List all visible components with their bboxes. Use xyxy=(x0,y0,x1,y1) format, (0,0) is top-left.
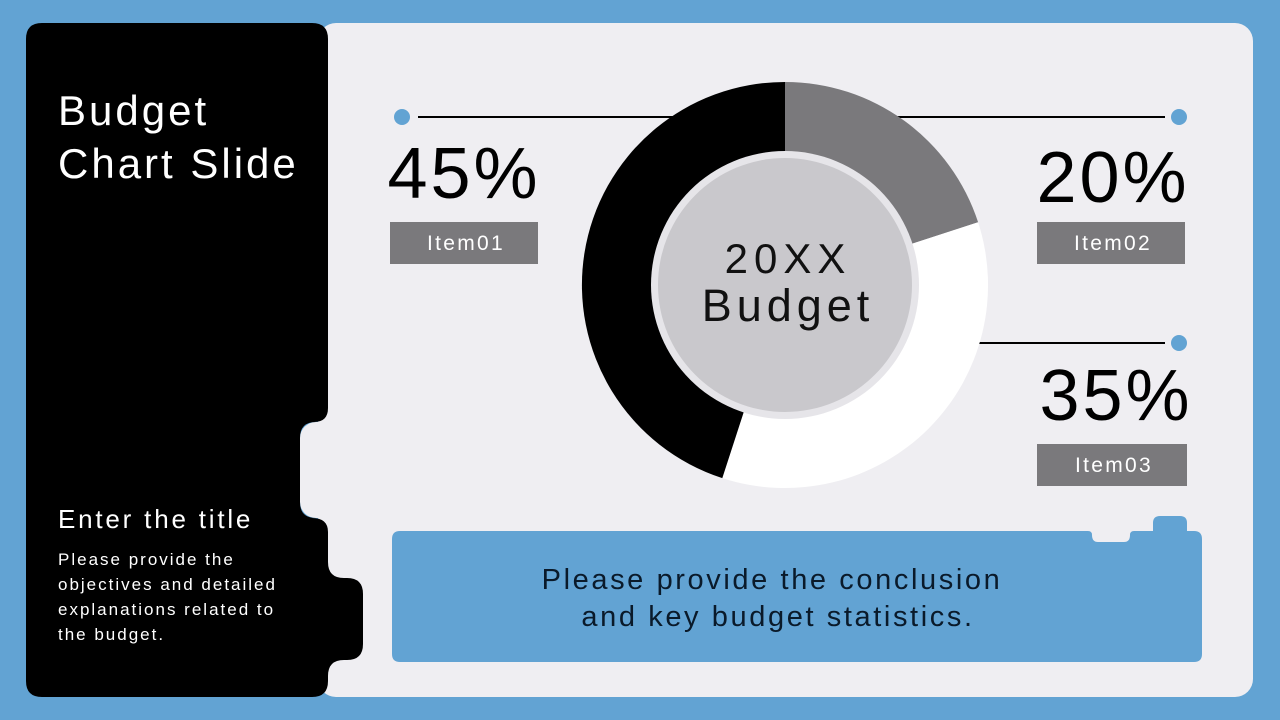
title: Chart Slide xyxy=(58,140,299,187)
conclusion box: and key budget statistics. xyxy=(581,601,975,633)
description text xyxy=(58,550,277,644)
title: Budget xyxy=(58,87,209,134)
description text: the budget. xyxy=(58,625,165,644)
item02: Item02 xyxy=(1074,232,1152,255)
item01: 45% xyxy=(387,134,541,214)
item03 xyxy=(1037,356,1193,486)
conclusion box: Please provide the conclusion xyxy=(542,564,1002,596)
description text: Please provide the xyxy=(58,550,235,569)
donut chart xyxy=(582,82,988,488)
connector lines xyxy=(394,109,1187,351)
panel: black sidebar xyxy=(26,23,363,697)
conclusion box xyxy=(392,516,1202,662)
item02 xyxy=(1036,138,1190,264)
description text: explanations related to xyxy=(58,600,275,619)
item01 xyxy=(387,134,541,264)
item03: 35% xyxy=(1039,356,1193,436)
donut chart: 20XX xyxy=(725,235,851,282)
item01: Item01 xyxy=(427,232,505,255)
donut chart: Budget xyxy=(702,280,874,331)
title xyxy=(58,87,299,187)
item03: Item03 xyxy=(1075,454,1153,477)
description text: objectives and detailed xyxy=(58,575,277,594)
panel: light content xyxy=(300,23,1253,697)
subtitle: Enter the title xyxy=(58,504,253,534)
item02: 20% xyxy=(1036,138,1190,218)
